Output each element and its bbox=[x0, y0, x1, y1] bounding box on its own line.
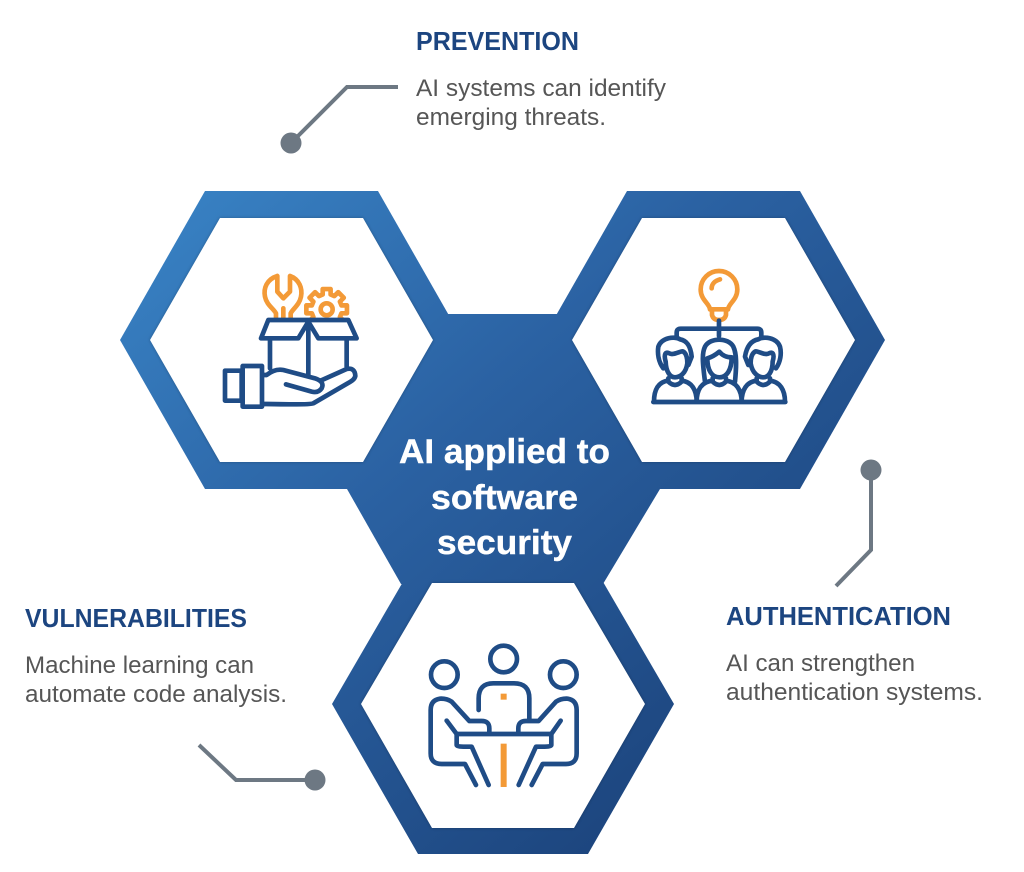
connector: authentication bbox=[836, 460, 882, 586]
connector: vulnerabilities bbox=[199, 745, 326, 790]
panel: authentication hexagon interior bbox=[572, 218, 855, 462]
heading: authentication: AUTHENTICATION bbox=[726, 601, 951, 631]
text block: vulnerabilities: automate code analysis. bbox=[25, 681, 287, 708]
panel: prevention hexagon interior bbox=[150, 218, 433, 462]
text block: vulnerabilities bbox=[25, 652, 287, 708]
heading: vulnerabilities: VULNERABILITIES bbox=[25, 603, 247, 633]
text block: authentication: authentication systems. bbox=[726, 679, 983, 706]
title: central label: software bbox=[431, 479, 578, 517]
panel: vulnerabilities hexagon frame bbox=[332, 556, 674, 854]
icon: people meeting at table bbox=[431, 646, 577, 787]
text block: vulnerabilities: Machine learning can bbox=[25, 652, 254, 679]
panel: vulnerabilities hexagon interior bbox=[361, 583, 645, 828]
text block: authentication bbox=[726, 650, 983, 706]
text block: prevention bbox=[416, 75, 666, 131]
title: central label: AI applied to bbox=[399, 433, 610, 471]
panel: authentication hexagon frame bbox=[542, 191, 885, 489]
title: central label: security bbox=[437, 524, 572, 562]
text block: prevention: emerging threats. bbox=[416, 104, 606, 131]
panel: prevention hexagon frame bbox=[120, 191, 463, 489]
icon: team with light bulb bbox=[653, 271, 785, 402]
title: central label bbox=[399, 433, 610, 562]
text block: authentication: AI can strengthen bbox=[726, 650, 915, 677]
heading: prevention: PREVENTION bbox=[416, 26, 579, 56]
icon: hand holding box with wrench and gear bbox=[225, 276, 357, 407]
panel: hexagon cluster frames bbox=[120, 191, 885, 854]
panel: central hexagon bbox=[347, 314, 660, 584]
text block: prevention: AI systems can identify bbox=[416, 75, 666, 102]
connector: prevention bbox=[280, 87, 398, 154]
